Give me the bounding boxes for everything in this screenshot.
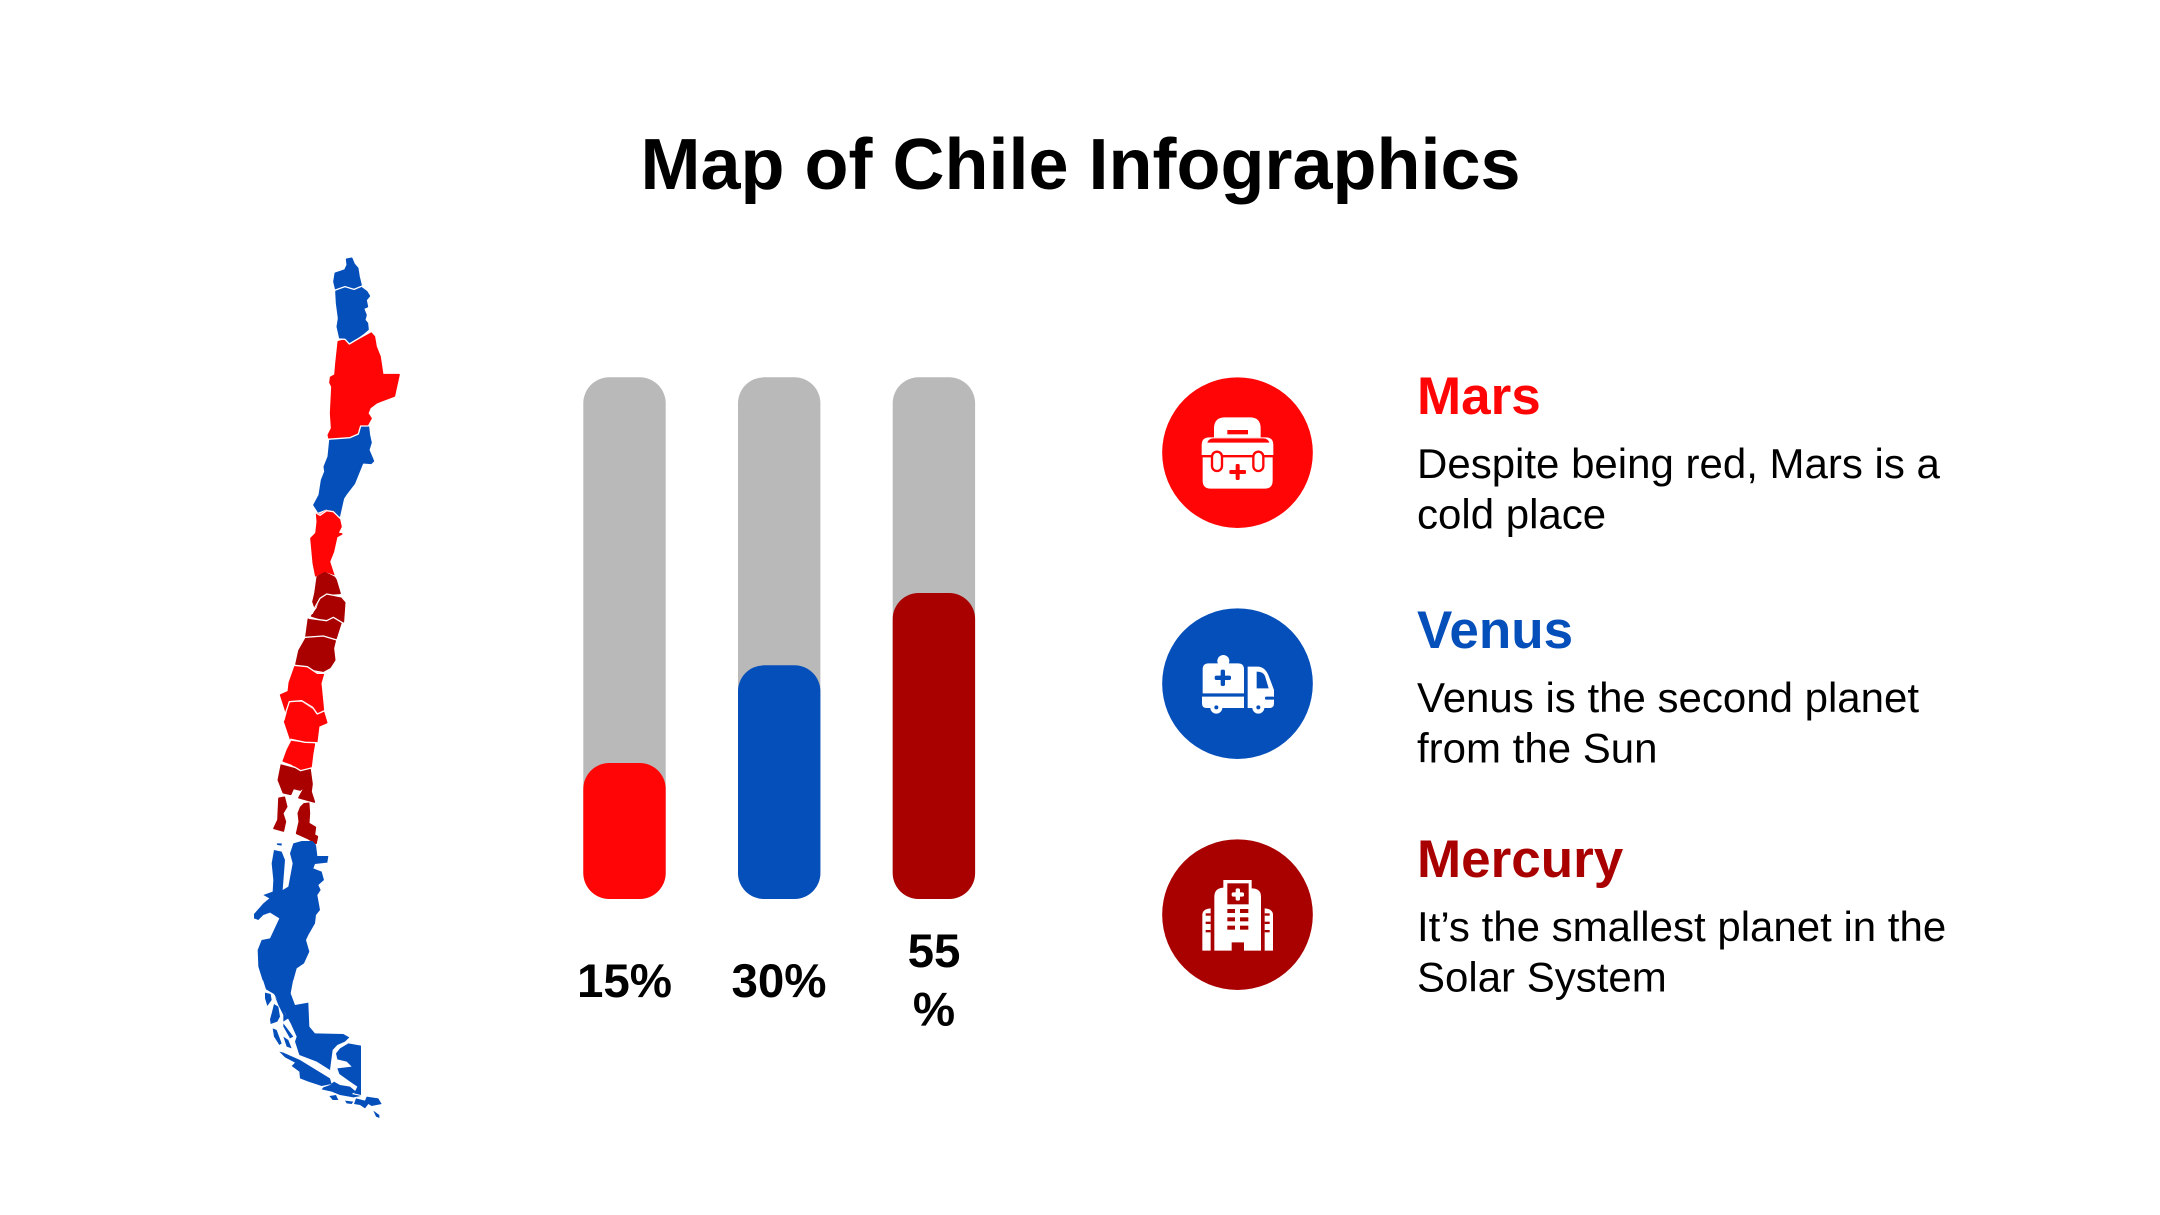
label: 55%: %: [913, 984, 955, 1036]
map of Chile: [254, 258, 399, 1118]
bar: 30%: [738, 377, 820, 899]
bar: 55%: [893, 377, 975, 899]
text block: Venus: [1417, 601, 1919, 772]
map: Aysen region: [254, 841, 328, 980]
text block: Mars: Mars: [1417, 367, 1541, 426]
bar chart: [577, 377, 975, 1036]
title: Map of Chile Infographics: [640, 125, 1521, 205]
map: central regions: [274, 573, 345, 843]
map: central borders: [280, 594, 342, 771]
map: northern regions: [311, 258, 399, 577]
text block: Mars: Despite being red, Mars is a: [1417, 440, 1941, 487]
label: 30%: 30%: [731, 955, 827, 1008]
text block: Mars: cold place: [1417, 490, 1606, 538]
text block: Mercury: [1417, 830, 1946, 1000]
label: 55%: 55: [908, 925, 960, 978]
label: 15%: 15%: [577, 955, 672, 1008]
text block: Venus: Venus: [1417, 601, 1573, 660]
bar: 15%: [583, 377, 666, 899]
text block: Mercury: It’s the smallest planet in the: [1417, 903, 1946, 950]
icon: toolbox on red circle: [1162, 377, 1313, 528]
text block: Venus: from the Sun: [1417, 724, 1657, 772]
map: Magallanes region: [263, 979, 382, 1118]
text block: Venus: Venus is the second planet: [1417, 674, 1919, 721]
icon: hospital on dark red circle: [1162, 839, 1313, 990]
map: northern borders: [314, 287, 372, 577]
icon: ambulance on blue circle: [1162, 608, 1313, 759]
text block: Mercury: Mercury: [1417, 830, 1624, 889]
text block: Mars: [1417, 367, 1941, 538]
text block: Mercury: Solar System: [1417, 954, 1667, 1000]
